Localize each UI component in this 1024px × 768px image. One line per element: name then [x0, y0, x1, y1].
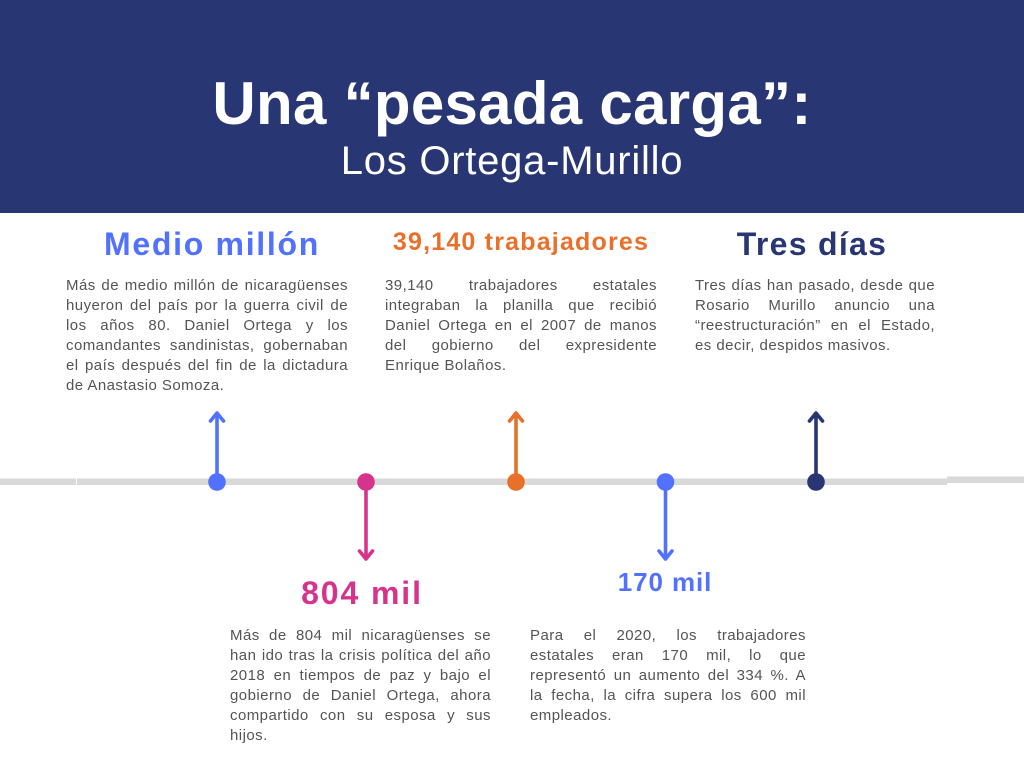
text: tres días: “reestructuración” en el Estado,: [695, 317, 935, 334]
heading: medio millón: Medio millón: [104, 226, 320, 262]
text: medio millón: los años 80. Daniel Ortega y los: [66, 317, 348, 334]
text: 804 mil: hijos.: [230, 727, 268, 744]
marker: tres días: [807, 413, 825, 491]
text: 804 mil: gobierno de Daniel Ortega, ahora: [230, 687, 491, 704]
text: 39,140 trabajadores: del gobierno del expresidente: [385, 337, 657, 354]
text: medio millón: comandantes sandinistas, gobernaban: [66, 337, 348, 354]
heading: tres días: Tres días: [737, 226, 887, 262]
text: 804 mil: [230, 627, 491, 744]
text: 804 mil: 2018 en tiempos de paz y bajo el: [230, 667, 491, 684]
header band: [0, 0, 1024, 213]
marker: 804 mil: [357, 473, 375, 559]
text: 170 mil: la fecha, la cifra supera los 600 mil: [530, 687, 806, 704]
text: 170 mil: [530, 627, 806, 724]
text: 39,140 trabajadores: integraban la planilla que recibió: [385, 297, 657, 314]
text: medio millón: el país después del fin de la dictadura: [66, 357, 348, 374]
text: 39,140 trabajadores: Daniel Ortega en el 2007 de manos: [385, 317, 657, 334]
text: 804 mil: Más de 804 mil nicaragüenses se: [230, 627, 491, 644]
text: tres días: es decir, despidos masivos.: [695, 337, 891, 354]
text: 804 mil: compartido con su esposa y sus: [230, 707, 491, 724]
heading: 170 mil: 170 mil: [618, 567, 712, 597]
text: 170 mil: estatales eran 170 mil, lo que: [530, 647, 806, 664]
text: 170 mil: representó un aumento del 334 %. A: [530, 667, 806, 684]
text: tres días: Tres días han pasado, desde que: [695, 277, 935, 294]
title: Una “pesada carga”:: [212, 70, 812, 137]
text: 39,140 trabajadores: Enrique Bolaños.: [385, 357, 506, 374]
marker: medio millón: [208, 413, 226, 491]
heading: 39,140 trabajadores: 39,140 trabajadores: [393, 228, 649, 256]
marker: 39,140 trabajadores: [507, 413, 525, 491]
subtitle: Los Ortega-Murillo: [341, 139, 683, 183]
marker: 170 mil: [657, 473, 674, 559]
text: 39,140 trabajadores: 39,140 trabajadores estatales: [385, 277, 657, 294]
text: 170 mil: empleados.: [530, 707, 612, 724]
text: medio millón: de Anastasio Somoza.: [66, 377, 224, 394]
text: medio millón: [66, 277, 348, 394]
text: medio millón: huyeron del país por la guerra civil de: [66, 297, 348, 314]
timeline bar: [0, 476, 1024, 485]
heading: 804 mil: 804 mil: [301, 575, 423, 611]
text: tres días: Rosario Murillo anuncio una: [695, 297, 935, 314]
text: 170 mil: Para el 2020, los trabajadores: [530, 627, 806, 644]
text: 804 mil: han ido tras la crisis política del año: [230, 647, 491, 664]
text: medio millón: Más de medio millón de nicaragüenses: [66, 277, 348, 294]
text: tres días: [695, 277, 935, 354]
text: 39,140 trabajadores: [385, 277, 657, 374]
